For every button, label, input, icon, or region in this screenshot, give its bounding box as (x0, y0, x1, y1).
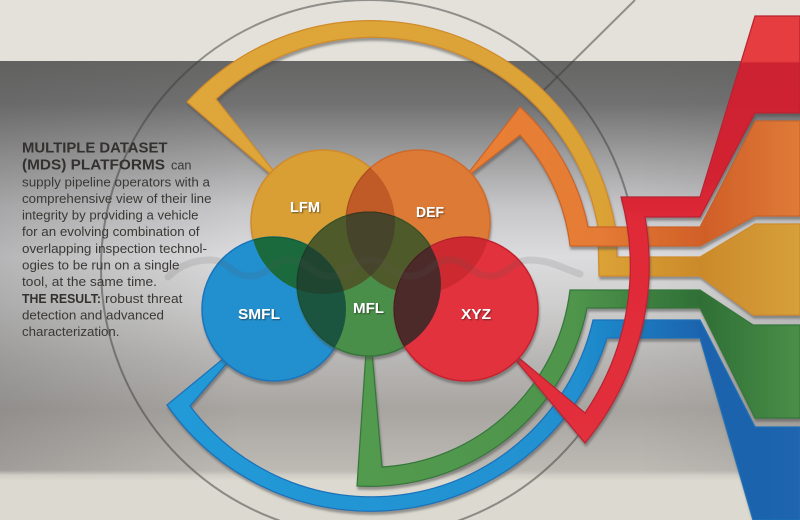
circle labels (238, 200, 491, 323)
circle labels: SMFL (238, 307, 280, 323)
overlap: LFM and SMFL (253, 236, 308, 289)
text block: MDS platforms description: THE RESULT: (22, 291, 101, 306)
text block: MDS platforms description: for an evolving combination of (22, 224, 200, 239)
text block: MDS platforms description: comprehensive view of their line (22, 191, 212, 206)
text block: MDS platforms description: ogies to be run on a single (22, 258, 180, 272)
circle labels: MFL (353, 301, 384, 317)
overlap: LFM and DEF (346, 168, 395, 276)
overlap: LFM and MFL (308, 212, 394, 291)
wavy pipe weld line (168, 260, 580, 277)
text block: MDS platforms description: MULTIPLE DATASET (22, 140, 168, 156)
circle: LFM (251, 150, 395, 294)
circle labels: XYZ (461, 307, 491, 323)
overlap: DEF and XYZ (396, 236, 488, 290)
ribbon: orange DEF (466, 107, 800, 246)
circle: MFL (297, 212, 441, 356)
circle: SMFL (202, 237, 346, 381)
circle labels: LFM (290, 200, 320, 216)
circle: DEF (346, 150, 490, 294)
text block: MDS platforms description: tool, at the same time. (22, 274, 157, 289)
text block: MDS platforms description: supply pipeline operators with a (22, 174, 211, 190)
overlap: DEF and MFL (347, 212, 441, 290)
text block: MDS platforms description: integrity by providing a vehicle (22, 208, 198, 222)
ribbon: green MFL (357, 290, 800, 486)
text block: MDS platforms description (22, 140, 212, 339)
overlap: SMFL and MFL (296, 246, 346, 348)
ribbon: red XYZ (514, 16, 800, 443)
large outline circle with pointer line (101, 0, 637, 520)
text block: MDS platforms description: robust threat (105, 291, 183, 306)
overlap: MFL and XYZ (394, 246, 441, 347)
overlap: LFM, SMFL and MFL (296, 246, 344, 294)
overlap: LFM, DEF and MFL (346, 212, 395, 276)
text block: MDS platforms description: (MDS) PLATFORMS (22, 158, 165, 174)
ribbon: yellow LFM (187, 21, 800, 315)
ribbon: blue SMFL (167, 320, 800, 520)
text block: MDS platforms description: overlapping inspection technol- (22, 241, 207, 256)
circle labels: DEF (416, 205, 444, 221)
circle: XYZ (394, 237, 538, 381)
text block: MDS platforms description: characterization. (22, 324, 119, 339)
text block: MDS platforms description: can (171, 158, 192, 172)
venn diagram of five inspection technologies (202, 150, 538, 381)
text block: MDS platforms description: detection and advanced (22, 308, 164, 322)
